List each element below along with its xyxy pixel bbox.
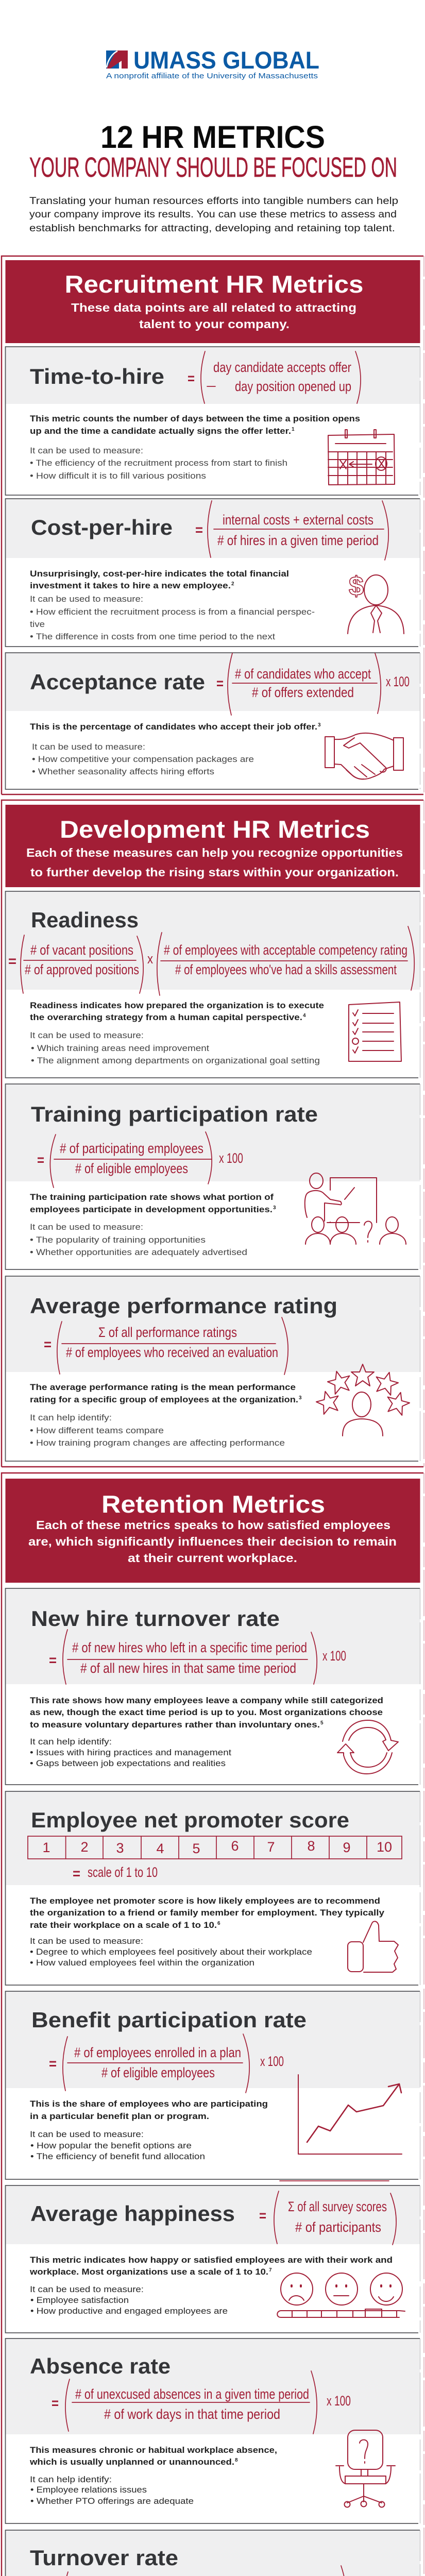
formula [259,2191,396,2245]
description: up and the time a candidate actually signs the offer letter. [30,426,291,436]
heading: Average performance rating [30,1294,337,1318]
identify list: • How different teams compare [30,1426,164,1435]
formula: Σ of all survey scores [288,2199,387,2214]
identify list: It can help identify: [30,1413,112,1422]
measure list: • The efficiency of the recruitment process from start to finish [30,458,287,468]
description: 4 [303,1013,306,1019]
description: The employee net promoter score is how likely employees are to recommend [30,1896,380,1906]
formula: x 100 [260,2054,284,2069]
card: cost-per-hire [5,499,420,647]
formula: # of work days in that time period [104,2406,280,2422]
identify list [30,2475,194,2506]
formula [216,653,410,715]
description [30,414,360,436]
description: The training participation rate shows what portion of [30,1192,274,1202]
icon: person with five stars [314,1364,412,1436]
measure list [32,742,254,776]
measure list [30,594,315,641]
description: Unsurprisingly, cost-per-hire indicates the total financial [30,569,289,579]
logo: UMass Global header [106,46,319,80]
measure list: • How popular the benefit options are [30,2141,192,2150]
formula: # of eligible employees [101,2065,215,2080]
identify list: It can help identify: [30,1737,112,1747]
formula: day position opened up [235,379,351,394]
formula [49,2034,284,2093]
formula [8,926,414,995]
description: 7 [269,2267,272,2273]
identify list: • How training program changes are affecting performance [30,1438,285,1448]
formula: x 100 [219,1150,243,1166]
description [30,1896,385,1930]
measure list [30,2284,228,2316]
formula: scale of 1 to 10 [88,1865,158,1880]
description: 3 [299,1395,302,1401]
scale 1 to 10 [28,1836,402,1859]
measure list: It can be used to measure: [30,2284,144,2294]
description [30,1192,276,1214]
formula [195,501,388,560]
measure list: It can be used to measure: [30,1936,143,1946]
heading: Training participation rate [31,1102,318,1126]
description: employees participate in development opportunities. [30,1205,273,1214]
description: 6 [217,1921,220,1926]
formula: x [147,951,153,967]
measure list: • Whether seasonality affects hiring efforts [32,767,214,776]
description: This metric counts the number of days between the time a position opens [30,414,360,423]
scale 1 to 10: 1 [42,1840,50,1855]
description: This rate shows how many employees leave a company while still categorized [30,1696,383,1705]
measure list: • Whether opportunities are adequately advertised [30,1247,247,1257]
heading: Turnover rate [30,2546,178,2570]
description [30,1382,302,1404]
icon: thumbs up [348,1921,398,1972]
description [30,1001,324,1022]
description: This metric indicates how happy or satisfied employees are with their work and [30,2255,393,2265]
banner: development: Development HR Metrics [60,816,370,843]
measure list: • How efficient the recruitment process is from a financial perspec- [30,607,315,617]
heading: Average happiness [30,2201,235,2226]
formula [37,1132,243,1188]
banner: development: to further develop the rising stars within your organization. [30,866,399,879]
formula: = [44,1336,52,1352]
icon: calendar [328,430,395,485]
description: 3 [318,722,321,728]
banner: retention: are, which significantly influences their decision to remain [28,1535,397,1548]
banner: development: Each of these measures can help you recognize opportunities [26,846,403,859]
formula: = [52,2395,59,2411]
description: workplace. Most organizations use a scale of 1 to 10. [29,2267,268,2277]
identify list: • Employee relations issues [30,2485,147,2495]
intro text [29,195,398,234]
formula: # of candidates who accept [235,666,371,682]
description: to measure voluntary departures rather than involuntary ones. [30,1720,320,1730]
heading: Absence rate [30,2354,171,2378]
formula: internal costs + external costs [223,512,373,528]
formula: x 100 [327,2393,351,2409]
identify list: It can help identify: [30,2475,112,2484]
description [29,2255,393,2277]
scale 1 to 10: 4 [156,1841,164,1856]
card: training participation rate [5,1084,420,1269]
description: The average performance rating is the mean performance [30,1382,296,1392]
card: average performance rating [5,1276,420,1461]
description: This is the share of employees who are participating [30,2099,268,2109]
measure list: • How valued employees feel within the organization [30,1958,254,1968]
heading: Cost-per-hire [31,515,173,539]
identify list [30,1737,231,1768]
measure list: • How competitive your compensation packages are [32,754,254,764]
card: acceptance rate [5,653,420,789]
formula: day candidate accepts offer [213,360,351,375]
scale 1 to 10: 2 [80,1839,89,1855]
formula: = [49,2056,57,2072]
description [29,2445,277,2467]
description: 1 [292,427,295,432]
measure list: • How productive and engaged employees are [30,2306,228,2316]
scale 1 to 10: 7 [267,1839,275,1855]
measure list: • How difficult it is to fill various positions [30,471,206,481]
formula: # of participants [295,2219,381,2235]
description: 2 [231,581,234,587]
identify list [30,1413,285,1448]
scale 1 to 10: 9 [343,1840,351,1855]
formula [73,1865,158,1882]
heading: Employee net promoter score [31,1808,349,1832]
banner: recruitment: These data points are all related to attracting [71,301,356,314]
description: This measures chronic or habitual workplace absence, [30,2445,277,2455]
description: investment it takes to hire a new employee. [30,581,231,590]
description: 5 [320,1720,324,1726]
measure list [30,446,287,481]
measure list: • The alignment among departments on organizational goal setting [31,1056,320,1065]
title: 12 HR METRICS [100,120,325,155]
icon: person with dollar sign: $ [349,571,364,601]
banner: recruitment: Recruitment HR Metrics [65,270,364,298]
card: time-to-hire [5,347,420,495]
card: turnover rate [5,2530,420,2576]
formula: = [49,1652,57,1668]
formula [52,2371,351,2434]
formula: = [8,953,16,969]
description: 3 [273,1205,276,1211]
heading: Readiness [31,908,139,932]
measure list: It can be used to measure: [30,2129,144,2139]
scale 1 to 10: 10 [377,1839,392,1855]
banner: retention [5,1479,420,1583]
formula: = [73,1866,80,1882]
formula: # of offers extended [252,685,354,700]
panel: development HR metrics [2,800,424,1467]
formula [50,2566,379,2576]
scale 1 to 10: 5 [192,1841,200,1856]
measure list: It can be used to measure: [30,594,143,604]
identify list: • Issues with hiring practices and management [30,1748,231,1757]
banner: recruitment: talent to your company. [139,317,290,331]
measure list: • The difference in costs from one time period to the next [30,632,275,641]
formula: # of eligible employees [75,1161,188,1176]
banner: retention: Each of these metrics speaks to how satisfied employees [36,1518,390,1532]
intro text: establish benchmarks for attracting, developing and retaining top talent. [29,223,395,234]
formula: Σ of all performance ratings [98,1325,237,1340]
formula: # of new hires who left in a specific time period [72,1640,307,1655]
formula [188,351,361,403]
intro text: Translating your human resources efforts into tangible numbers can help [29,195,398,207]
description: the organization to a friend or family member for employment. They typically [30,1908,385,1918]
logo: UMass Global header: A nonprofit affiliate of the University of Massachusetts [106,72,318,80]
measure list [30,2129,205,2161]
heading: New hire turnover rate [31,1606,280,1631]
card: absence rate [5,2338,420,2523]
formula: # of all new hires in that same time period [80,1660,296,1676]
formula: # of employees who received an evaluation [66,1345,278,1360]
formula: # of employees enrolled in a plan [74,2045,241,2060]
banner: recruitment [5,260,420,343]
formula: # of participating employees [60,1141,203,1156]
description: This is the percentage of candidates who accept their job offer. [30,722,317,732]
formula [44,1317,288,1375]
description: in a particular benefit plan or program. [30,2111,209,2121]
formula: = [195,522,203,538]
card: average happiness [5,2181,420,2333]
formula: = [216,675,224,691]
measure list: It can be used to measure: [30,1222,143,1232]
card: new hire turnover rate [5,1588,420,1785]
banner: retention: at their current workplace. [128,1551,297,1565]
measure list [30,1030,320,1065]
description: rate their workplace on a scale of 1 to 10. [30,1920,217,1930]
card: employee net promoter score [5,1791,420,1985]
icon: three faces with rating bar [277,2273,405,2317]
description [30,569,289,590]
scale 1 to 10: 6 [231,1838,239,1854]
icon: cycle arrows [337,1720,398,1774]
description: which is usually unplanned or unannounced. [29,2457,234,2467]
card: readiness [5,891,420,1078]
scale 1 to 10: 3 [116,1840,124,1856]
icon: empty office chair with question mark [336,2430,395,2507]
formula: = [259,2208,266,2224]
banner: retention: Retention Metrics [101,1490,325,1518]
icon: checklist [349,1002,401,1061]
logo: UMass Global header: UMASS GLOBAL [133,46,319,74]
measure list [30,1936,312,1968]
description: Readiness indicates how prepared the organization is to execute [30,1001,324,1010]
description [30,1696,383,1730]
formula: # of hires in a given time period [217,533,379,548]
description: rating for a specific group of employees at the organization. [30,1395,298,1404]
formula: # of vacant positions [30,942,133,958]
scale 1 to 10: 8 [307,1838,315,1854]
measure list: It can be used to measure: [30,446,143,455]
measure list: • The popularity of training opportunities [30,1235,206,1245]
icon: rising line chart [298,2075,402,2154]
description [30,2099,268,2121]
formula: x 100 [386,674,410,689]
formula: = [188,370,195,386]
formula: = [37,1152,44,1168]
banner: development [5,805,420,887]
icon: handshake [325,733,403,779]
intro text: your company improve its results. You can use these metrics to assess and [29,209,397,220]
formula: # of approved positions [25,962,139,977]
icon: trainer with audience [305,1173,406,1244]
measure list: It can be used to measure: [32,742,145,752]
formula: # of unexcused absences in a given time period [75,2386,309,2402]
formula: x 100 [322,1648,346,1664]
measure list: tive [30,619,45,629]
measure list: • Employee satisfaction [30,2295,129,2305]
measure list: It can be used to measure: [30,1030,144,1040]
description: the overarching strategy from a human capital perspective. [30,1012,302,1022]
heading: Acceptance rate [30,670,205,694]
card: benefit participation rate [5,1991,420,2179]
heading: Time-to-hire [30,364,164,388]
panel: recruitment HR metrics [2,256,424,794]
formula [49,1630,346,1684]
measure list: • Which training areas need improvement [31,1043,209,1053]
description: as new, though the exact time period is up to you. Most organizations choose [30,1707,383,1717]
description: 8 [235,2458,238,2463]
panel: retention metrics [2,1473,424,2576]
icon: person with dollar sign [348,571,404,634]
identify list: • Whether PTO offerings are adequate [30,2496,194,2506]
measure list: • The efficiency of benefit fund allocation [30,2151,205,2161]
identify list: • Gaps between job expectations and realities [30,1758,226,1768]
measure list: • Degree to which employees feel positively about their workplace [30,1947,312,1957]
measure list [30,1222,247,1257]
heading: Benefit participation rate [31,2008,307,2032]
